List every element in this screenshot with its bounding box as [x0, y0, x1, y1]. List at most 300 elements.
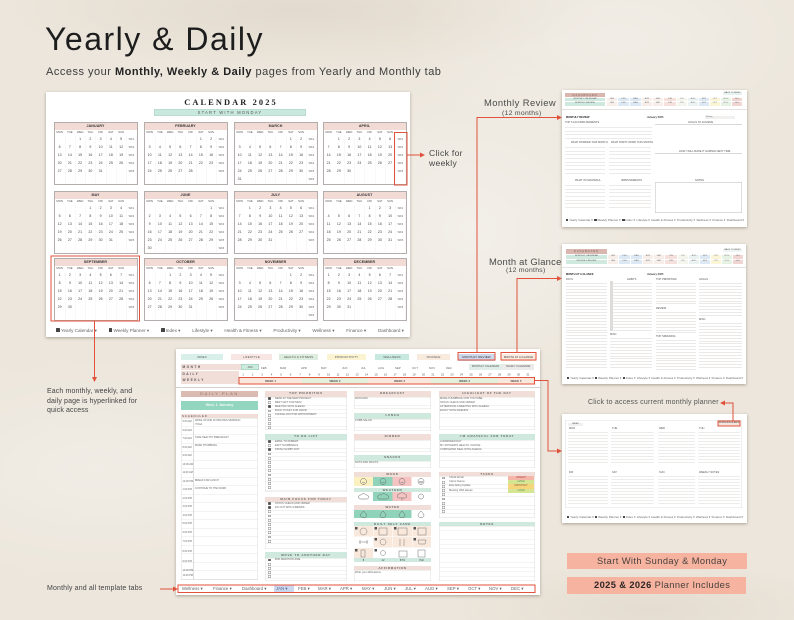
month: June: SUN	[208, 199, 214, 203]
month: June: 7	[200, 214, 202, 218]
month: October: 6	[149, 281, 151, 285]
monthly review month row: JAN	[610, 102, 614, 104]
month: June: 25	[168, 238, 172, 242]
month: June: WK6	[219, 247, 224, 250]
month: March: 16	[299, 153, 303, 157]
week column 4	[698, 426, 740, 506]
month: June	[144, 191, 228, 254]
grateful for today: COMPLETED DEAL WITH ALEESA	[440, 448, 482, 451]
month: December: WK2	[398, 282, 403, 285]
planner tab bar: Index ▾	[626, 515, 635, 519]
day number row: 3	[261, 372, 263, 376]
review tab bar: Wellness ▾	[696, 218, 711, 222]
monthly calendar month row: JUL	[680, 98, 684, 100]
callout: start with sunday and monday	[567, 552, 747, 569]
monthly calendar month row: MONTHLY CALENDAR	[575, 255, 598, 257]
label: month at glance duration: (12 months)	[506, 267, 546, 274]
days column	[566, 278, 607, 370]
divider	[562, 267, 746, 268]
month: July: 18	[279, 222, 283, 226]
month: April: MON	[325, 130, 332, 134]
month: November: WK4	[309, 298, 314, 301]
month: November: 20	[268, 297, 272, 301]
weekly label: WEEKLY	[182, 378, 205, 382]
lunch: COBB SALAD	[355, 418, 372, 422]
move to another day: BUK MEDITION ZINE	[275, 558, 300, 561]
month: May	[54, 191, 138, 254]
month: November	[234, 258, 318, 321]
month: May: 6	[69, 214, 71, 218]
schedule rows: TAKE HEALTHY BREAKFAST	[195, 436, 229, 438]
month: July: 22	[248, 230, 252, 234]
monthly calendar month row: APR	[645, 98, 649, 100]
month: December: 20	[378, 289, 382, 293]
month: May: TUE	[67, 199, 73, 203]
month: August: 26	[337, 238, 341, 242]
daily label	[181, 371, 239, 377]
weather tracker: WEATHER	[383, 488, 402, 492]
month: April: 13	[388, 145, 392, 149]
month: December: 18	[357, 289, 361, 293]
month: January: 13	[58, 153, 62, 157]
month: January: 16	[88, 153, 92, 157]
month: July: 28	[238, 238, 242, 242]
bottom month tab bar: APR ▾	[340, 586, 352, 591]
month: November: 25	[248, 305, 252, 309]
month: December: 13	[378, 281, 382, 285]
month: September: 30	[68, 305, 72, 309]
day number row: 5	[280, 372, 282, 376]
month: September: 19	[99, 289, 103, 293]
month: June: WK2	[219, 215, 224, 218]
month: September: WK4	[129, 298, 134, 301]
schedule rows: 1:00 PM	[182, 488, 192, 491]
month: April: 4	[369, 137, 371, 141]
inner frame	[565, 420, 742, 508]
month: December: 29	[327, 305, 331, 309]
bottom month tab bar: MAY ▾	[362, 586, 374, 591]
month: July: 1	[249, 206, 251, 210]
daily plan heading: DAILY PLAN	[200, 391, 239, 396]
lunch: LUNCH	[386, 413, 400, 417]
month: May: 18	[119, 222, 123, 226]
month: October: 26	[209, 297, 213, 301]
month: November: WK2	[309, 282, 314, 285]
month: March: 17	[238, 161, 242, 165]
label: click for weekly: weekly	[429, 158, 457, 168]
month: December: 6	[379, 273, 381, 277]
month: May: 15	[88, 222, 92, 226]
month: January: WK3	[129, 154, 134, 157]
month: May: WK2	[129, 215, 134, 218]
month: January: 14	[68, 153, 72, 157]
month: July: 9	[259, 214, 261, 218]
month: August: 19	[337, 230, 341, 234]
panel: meals and trackers column	[354, 391, 431, 581]
back to index button: BACK TO INDEX	[724, 249, 740, 251]
month: May: 24	[109, 230, 113, 234]
month: September: 27	[109, 297, 113, 301]
monthly review month row: SEP	[703, 260, 707, 262]
month: May: MAY	[92, 193, 99, 197]
notes	[439, 522, 535, 581]
month: November: 15	[289, 289, 293, 293]
month: August: WK2	[398, 215, 403, 218]
month: September: FRI	[98, 266, 103, 270]
day number row: 30	[517, 372, 520, 376]
month: December: 28	[388, 297, 392, 301]
month: December: MON	[325, 266, 332, 270]
month: September: 1	[59, 273, 61, 277]
highlight of the day: MAKE THUMBNAIL FOR YOUTUBE	[440, 396, 482, 400]
monthly review month row: NOV	[724, 102, 728, 104]
lunch	[354, 413, 431, 431]
month: April: SAT	[377, 130, 382, 134]
month: July: MON	[236, 199, 243, 203]
month: November: 2	[300, 273, 302, 277]
month: August: 23	[378, 230, 382, 234]
month: December: 16	[337, 289, 341, 293]
month: August: 31	[388, 238, 392, 242]
month: October: WK3	[219, 290, 224, 293]
month: December: SAT	[377, 266, 382, 270]
month: October: 2	[179, 273, 181, 277]
month: July: 6	[300, 206, 302, 210]
day number row: 4	[271, 372, 273, 376]
month: April: 14	[327, 153, 331, 157]
month: March: 31	[238, 177, 242, 181]
schedule rows: 10:00 PM	[182, 569, 193, 572]
month: September: 2	[69, 273, 71, 277]
month: May: 26	[58, 238, 62, 242]
month: March: 9	[300, 145, 302, 149]
month: May: 14	[78, 222, 82, 226]
review box 1	[655, 121, 742, 125]
month: November: SUN	[298, 266, 304, 270]
monthly review month row: MAR	[634, 260, 639, 262]
month: December: 31	[347, 305, 351, 309]
top priorities: READ 10 THE NEW PROJECT	[275, 396, 311, 400]
month: April: 30	[347, 169, 351, 173]
month: April: 1	[338, 137, 340, 141]
month: November: 30	[299, 305, 303, 309]
month: March: 2	[300, 137, 302, 141]
month: April: 9	[348, 145, 350, 149]
month: January: 18	[109, 153, 113, 157]
month: May: SAT	[108, 199, 113, 203]
month: April: 11	[368, 145, 371, 149]
month: March: WK2	[309, 146, 314, 149]
day number row: 15	[374, 372, 378, 376]
month: February: 5	[169, 145, 171, 149]
schedule rows: 9:00 PM	[182, 560, 192, 563]
schedule rows: 8:00 AM	[182, 446, 192, 448]
dinner	[354, 434, 431, 452]
monthly review month row	[565, 102, 742, 106]
monthly calendar month row: SEP	[703, 255, 707, 257]
monthly review month row	[566, 260, 742, 264]
month: November: 26	[258, 305, 262, 309]
review tab bar	[566, 218, 744, 222]
month: July: 10	[268, 214, 272, 218]
month: March: THU	[268, 130, 273, 134]
month: April	[322, 122, 406, 185]
month: November: 10	[238, 289, 242, 293]
month: July: 15	[248, 222, 252, 226]
yearly tab bar: Lifestyle ▾	[192, 328, 213, 332]
month: February: 3	[149, 145, 151, 149]
tasks: Etsy listing Update	[449, 484, 470, 487]
month selector row	[241, 364, 534, 370]
month: October: 14	[158, 289, 162, 293]
bottom month tab bar: Dashboard ▾	[242, 586, 266, 591]
day number row: 10	[327, 372, 330, 376]
month: December: 10	[347, 281, 351, 285]
dashboard header: DASHBOARD	[574, 249, 599, 253]
month: April: TUE	[336, 130, 342, 134]
month: February: WED	[167, 130, 173, 134]
month: January: THU	[88, 130, 93, 134]
month: September: WED	[77, 266, 83, 270]
monthly calendar month row: OCT	[714, 255, 718, 257]
month: June: 8	[210, 214, 212, 218]
bottom month tab bar: Wellness ▾	[182, 586, 203, 591]
schedule rows: 9:00 AM	[182, 454, 192, 457]
top accomplishments: TOP 5 ACCOMPLISHMENTS	[565, 121, 599, 124]
monthly review month row: MONTHLY REVIEW	[577, 260, 596, 262]
month: February: 22	[199, 161, 203, 165]
month: January: SAT	[108, 130, 113, 134]
month: August: SUN	[387, 199, 393, 203]
month: September: WK2	[129, 282, 134, 285]
week column 2: SAT	[612, 470, 617, 474]
month: July: 12	[289, 214, 293, 218]
monthly review month row: MONTHLY REVIEW	[575, 102, 595, 104]
month: April: 3	[358, 137, 360, 141]
month: June: 21	[199, 230, 203, 234]
snacks: NUTS AND FRUITS	[355, 460, 378, 464]
month: July: 11	[279, 214, 282, 218]
month: October: 4	[200, 273, 202, 277]
month: January: JANUARY	[87, 124, 104, 128]
index pill	[568, 422, 583, 426]
month: May: 13	[68, 222, 72, 226]
month selector row: MAR	[280, 366, 286, 370]
month: April: 15	[337, 153, 341, 157]
month: March: 28	[279, 169, 283, 173]
month: May: WED	[77, 199, 83, 203]
month: April: 24	[357, 161, 361, 165]
month: October: TUE	[157, 266, 163, 270]
breakfast: AVOCADO	[355, 396, 368, 400]
month at a glance button: MONTH AT A GLANCE	[719, 422, 739, 424]
bottom month tab bar: MAR ▾	[318, 586, 331, 591]
review column 2	[609, 140, 653, 174]
schedule rows: CONTINUE TO THE WORK	[195, 487, 226, 490]
month: May: 28	[78, 238, 82, 242]
glance title: MONTH AT A GLANCE	[566, 272, 593, 276]
monthly review month row: MAY	[656, 102, 660, 104]
day number row: 11	[336, 372, 340, 376]
month: January: 22	[78, 161, 82, 165]
month: August: WK5	[398, 239, 403, 242]
month: January: WK4	[129, 162, 134, 165]
highlight of the day: STOCK CHECK AND ORDER	[440, 401, 475, 404]
month: January: WK1	[129, 138, 134, 141]
month: April: 6	[389, 137, 391, 141]
month: July: FRI	[278, 199, 283, 203]
month: July: 25	[279, 230, 283, 234]
month: September: SEPTEMBER	[84, 260, 107, 264]
month: May: WK1	[129, 207, 134, 210]
month: June: 28	[199, 238, 203, 242]
top priorities	[265, 391, 347, 430]
review notes box: NOTES	[695, 178, 704, 182]
month selector row: MONTHLY CALENDAR	[472, 365, 499, 368]
month: May: 31	[109, 238, 113, 242]
month: February: 10	[148, 153, 152, 157]
day number row: 1	[242, 372, 244, 376]
bottom month tab bar: Finance ▾	[213, 586, 232, 591]
priorities column: TOP SPENDING	[656, 335, 676, 338]
panel: daily planner page	[176, 349, 540, 595]
month: December: SUN	[387, 266, 393, 270]
month: June: JUNE	[180, 193, 190, 197]
month: October: SAT	[198, 266, 203, 270]
month: May: 23	[99, 230, 103, 234]
monthly calendar month row: DEC	[736, 255, 740, 257]
main focus for today	[265, 496, 347, 549]
review column 4: IMPROVEMENTS	[621, 178, 642, 182]
bottom month tab bar: AUG ▾	[425, 586, 438, 591]
month: April: 27	[388, 161, 392, 165]
day number row: 6	[290, 372, 292, 376]
month: November: 7	[280, 281, 282, 285]
month: September: 10	[78, 281, 82, 285]
scheduled heading: SCHEDULED	[182, 414, 208, 418]
panel: current monthly planner page	[562, 414, 747, 523]
month: September: SAT	[108, 266, 113, 270]
to do list	[265, 434, 347, 492]
month: January	[54, 122, 138, 185]
monthly calendar month row: MAR	[634, 255, 639, 257]
month: December: 11	[358, 281, 361, 285]
monthly review month row: SEP	[702, 102, 706, 104]
monthly calendar month row: MONTHLY CALENDAR	[573, 98, 596, 100]
month: July	[234, 191, 318, 254]
month: May: 3	[110, 206, 112, 210]
month: July: WK3	[309, 223, 314, 226]
month: January: MON	[56, 130, 63, 134]
affirmation: AFFIRMATION	[378, 566, 407, 570]
month: January: WK5	[129, 170, 134, 173]
glance tab bar: Dashboard ▾	[726, 376, 743, 380]
month: February: 16	[209, 153, 213, 157]
month: October: 15	[168, 289, 172, 293]
top accomplishments	[565, 121, 652, 139]
planner tab bar: Productivity ▾	[677, 515, 695, 519]
monthly calendar month row: APR	[646, 255, 650, 257]
month: August: THU	[356, 199, 362, 203]
month: July: 27	[299, 230, 303, 234]
month: November: WED	[257, 266, 263, 270]
monthly calendar month row: AUG	[692, 255, 696, 257]
schedule rows: 11:00 PM	[182, 574, 193, 577]
month: March: MARCH	[269, 124, 282, 128]
month: May: 4	[120, 206, 122, 210]
month: January: 21	[68, 161, 72, 165]
month: August: AUGUST	[357, 193, 372, 197]
month: July: 20	[299, 222, 303, 226]
month: November: WK1	[309, 274, 314, 277]
month: December: WK4	[398, 298, 403, 301]
month: December: WK5	[398, 306, 403, 309]
month: December: 23	[337, 297, 341, 301]
month: February: THU	[178, 130, 183, 134]
month: March: 3	[239, 145, 241, 149]
month: July: WK2	[309, 215, 314, 218]
review tab bar: Yearly Calendar ▾	[569, 218, 593, 222]
month: January: 29	[78, 169, 82, 173]
start with monday banner	[154, 108, 306, 116]
schedule rows: 8:00 PM	[182, 550, 192, 553]
month: October: 13	[148, 289, 152, 293]
review title: MONTHLY REVIEW	[566, 116, 590, 118]
month: February: 12	[168, 153, 172, 157]
month: March: 22	[289, 161, 293, 165]
day number row: 23	[450, 372, 454, 376]
month: May: THU	[88, 199, 93, 203]
month: February: 20	[178, 161, 182, 165]
month: January: 19	[119, 153, 123, 157]
month: October: WK5	[219, 306, 224, 309]
day number row: 20	[422, 372, 425, 376]
monthly review month row: JUN	[668, 102, 672, 104]
month: November: 12	[258, 289, 262, 293]
glance tab bar: Index ▾	[626, 376, 635, 380]
review box 2: HOW I WILL MAKE IT HAPPEN NEXT TIME	[679, 150, 730, 152]
panel: yearly calendar page	[46, 92, 410, 337]
month: May: 16	[99, 222, 103, 226]
month: June: WK4	[219, 231, 224, 234]
month: July: SAT	[288, 199, 293, 203]
month: October: 5	[210, 273, 212, 277]
main focus for today: DO OUT WITH FRIENDS	[275, 506, 304, 509]
review tab bar: Productivity ▾	[677, 218, 695, 222]
habits column: HABITS	[627, 278, 636, 281]
highlight of the day: AFTERNOON A MEETING WITH ALEESA	[440, 405, 489, 408]
schedule rows: 3:00 PM	[182, 505, 192, 508]
month: July: 19	[289, 222, 293, 226]
month: October: 19	[209, 289, 213, 293]
month: March: SAT	[288, 130, 293, 134]
label: current monthly planner: Click to access current monthly planner	[588, 399, 719, 406]
month: August: 30	[378, 238, 382, 242]
panel: monthly review page	[562, 90, 747, 227]
month: February: SAT	[198, 130, 203, 134]
goals column: MISC	[699, 318, 705, 320]
bottom month tab bar: JUL ▾	[405, 586, 416, 591]
back to index button	[723, 92, 742, 95]
month: June: 22	[209, 230, 213, 234]
month: November: 16	[299, 289, 303, 293]
month: April: WK4	[398, 162, 403, 165]
month: February: MON	[146, 130, 153, 134]
month: May: 21	[78, 230, 82, 234]
move to another day: MOVE TO ANOTHER DAY	[281, 552, 331, 556]
month: October: 12	[209, 281, 213, 285]
month: November: NOVEMBER	[265, 260, 286, 264]
